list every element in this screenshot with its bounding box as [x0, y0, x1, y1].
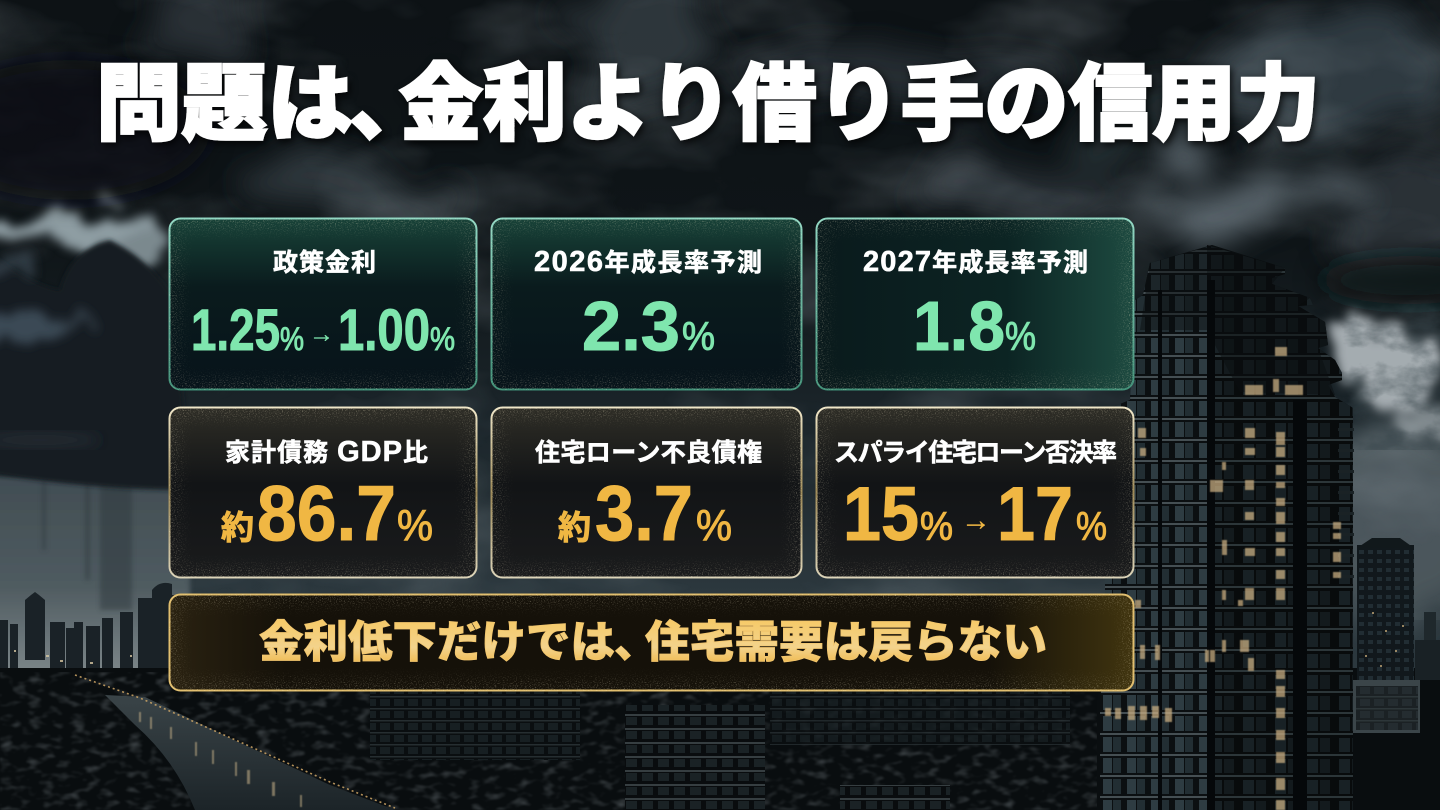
label: 2026年成長率予測: [534, 246, 762, 278]
value: 15% to 17%: %: [920, 505, 953, 549]
bright sky break left: [0, 193, 168, 258]
value: 15% to 17%: →: [961, 504, 991, 537]
value: 1.8%: 1.8: [913, 287, 1005, 365]
label: 2027年成長率予測: [863, 246, 1088, 278]
banner text: 住宅需要は戻らない: [645, 618, 1047, 667]
dark cloud right: [1320, 256, 1440, 304]
value: about 3.7%: [558, 469, 732, 557]
value: about 86.7%: %: [397, 501, 433, 550]
low building right windows: [1356, 686, 1418, 730]
tower top dark: [1140, 245, 1335, 395]
conclusion banner: [170, 594, 1134, 690]
dark mottling over bright right sky: [1340, 300, 1440, 450]
value: about 3.7%: %: [696, 501, 732, 550]
value: about 3.7%: 約: [558, 509, 591, 546]
panel: household debt to GDP: [170, 408, 476, 578]
value: 15% to 17%: 15: [843, 472, 919, 557]
panel: mortgage bad loans: [492, 408, 802, 578]
value: 2.3%: %: [682, 315, 715, 359]
value: 1.25% to 1.00%: →: [309, 321, 334, 348]
value: 15% to 17%: [843, 472, 1107, 557]
value: about 86.7%: 約: [221, 509, 254, 546]
right distant tower: [1357, 538, 1440, 680]
title: 問題は: [96, 57, 353, 151]
bright sky break right: [1326, 316, 1440, 438]
value: 1.8%: %: [1005, 315, 1036, 359]
mottled cloud texture: [0, 0, 1440, 620]
rain column lower left: [0, 476, 190, 676]
city texture: [0, 672, 1100, 810]
river with reflections: [105, 695, 395, 810]
value: 15% to 17%: 17: [997, 472, 1073, 557]
lit windows: [1105, 347, 1341, 810]
label: 家計債務 GDP比: [225, 436, 428, 468]
label: 政策金利: [273, 249, 376, 277]
dark storm cloud left: [0, 240, 190, 490]
value: 15% to 17%: %: [1076, 505, 1107, 549]
low building right: [1352, 680, 1420, 733]
value: about 86.7%: 86.7: [257, 469, 396, 557]
value: 1.25% to 1.00%: 1.00: [338, 298, 430, 363]
value: 1.25% to 1.00%: 1.25: [191, 298, 280, 363]
tower left face: [1100, 247, 1207, 810]
value: 1.25% to 1.00%: %: [280, 321, 304, 357]
banner text: [259, 618, 1047, 667]
distant skyline left: [0, 583, 1172, 690]
tower pillars: [1158, 280, 1307, 810]
soft cloud streaks in upper sky: [120, 0, 1440, 620]
banner text: 、: [614, 618, 658, 667]
card surface grain: [169, 218, 1134, 691]
label: スパライ住宅ローン否決率: [834, 439, 1117, 467]
tower balconies: [1338, 428, 1354, 578]
title: 金利より借り手の信用力: [399, 57, 1320, 151]
value: about 3.7%: 3.7: [595, 469, 693, 557]
panel: 2027 growth forecast: [816, 218, 1134, 390]
rain streaks: [42, 480, 132, 610]
panel: policy rate: [170, 218, 476, 390]
banner text: 金利低下だけでは: [259, 618, 615, 667]
title: 、: [349, 57, 433, 151]
label: 住宅ローン不良債権: [535, 439, 762, 467]
panel: 2026 growth forecast: [492, 218, 802, 390]
mid-rise blocks: [370, 690, 1070, 810]
skyline lights: [14, 650, 160, 670]
value: 2.3%: 2.3: [582, 287, 680, 365]
value: 1.25% to 1.00%: [191, 298, 455, 363]
dark cloud top left: [0, 60, 210, 200]
panel: subprime mortgage rejection rate: [816, 408, 1134, 578]
foreground tower: [1097, 245, 1354, 810]
value: 1.25% to 1.00%: %: [430, 321, 455, 357]
ground: [0, 668, 1440, 810]
riverside lights: [75, 675, 395, 808]
tower middle face: [1207, 245, 1353, 810]
